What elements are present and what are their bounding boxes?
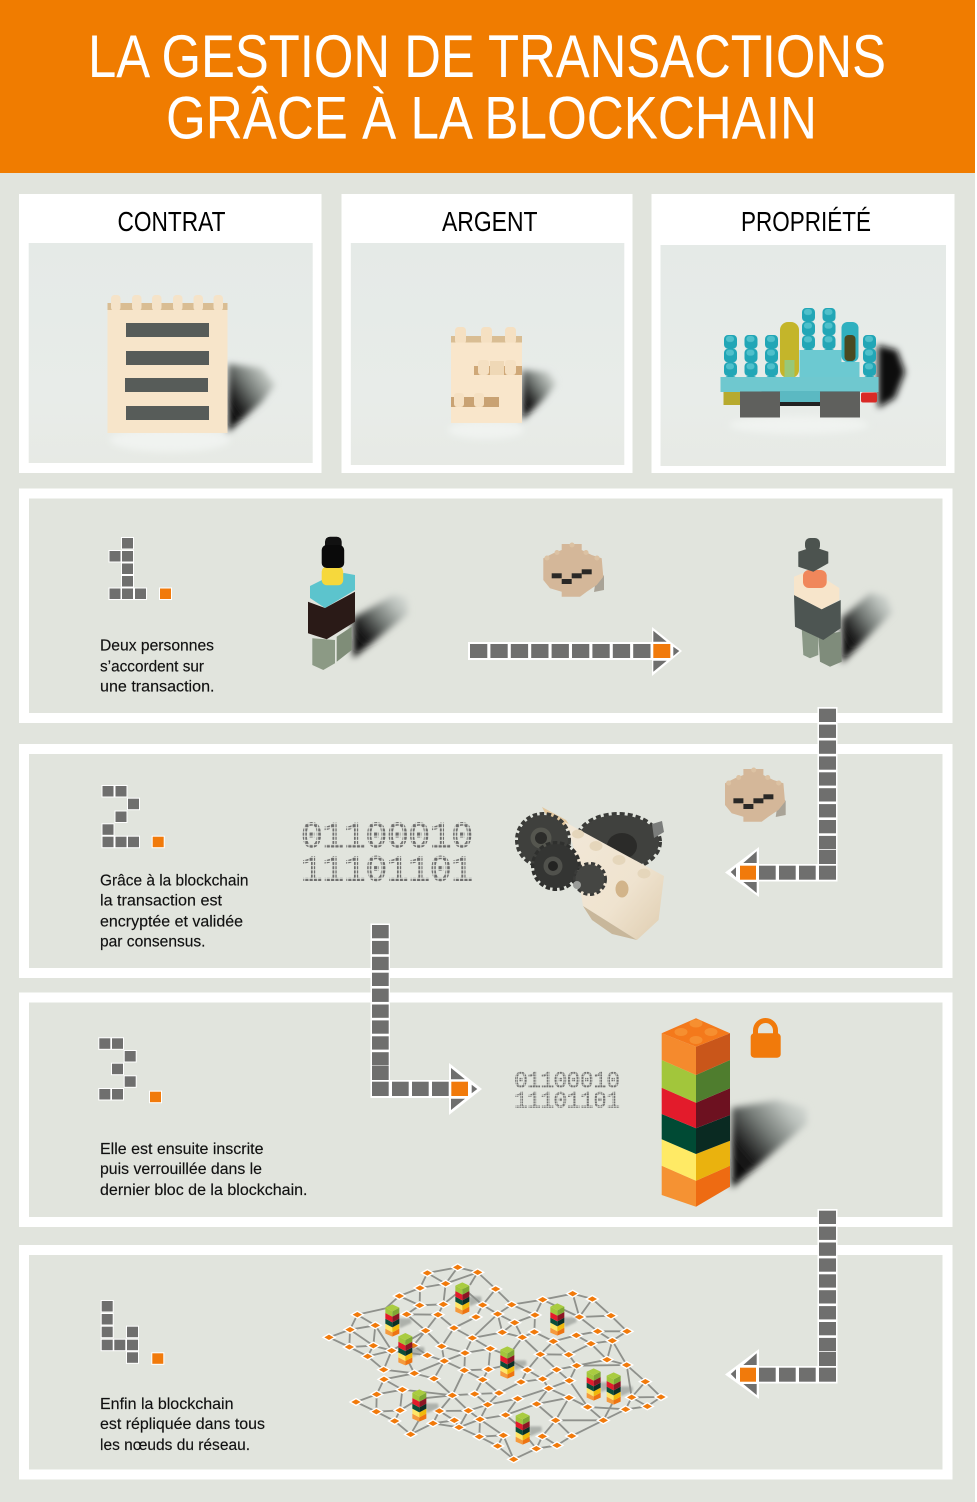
node tower [587,1368,613,1401]
node tower [455,1282,482,1315]
title banner [0,0,975,173]
panel: contrat: CONTRAT [118,206,226,237]
title banner: GRÂCE À LA BLOCKCHAIN [166,84,817,152]
icon: figure 1 [308,537,408,670]
icon: padlock [751,1020,781,1058]
binary code [514,1068,620,1114]
text: step 2: Grâce à la blockchain [100,873,248,890]
text: step 3: Elle est ensuite inscrite [100,1141,264,1158]
text: step 3: dernier bloc de la blockchain. [100,1182,308,1199]
icon: token [725,768,786,822]
arrow: transfer [468,627,682,676]
panel: argent: ARGENT [442,206,538,237]
panel: propriété [652,194,954,473]
text: step 4 [100,1396,265,1454]
text: step 1: s’accordent sur [100,658,205,676]
panel: step 1 [24,494,948,718]
binary code: 01100010 [301,817,473,858]
panel: argent [342,194,632,473]
node tower [500,1346,527,1379]
numeral 4 [102,1301,163,1364]
node tower [607,1372,633,1405]
network nodes [324,1265,666,1462]
text: step 3 [100,1141,308,1199]
binary code: 01100010 [514,1068,620,1094]
network links [329,1267,661,1459]
icon: car brick [720,308,880,418]
icon: contract brick [108,295,228,433]
numeral 1 [110,538,171,599]
panel: step 2 [24,749,948,973]
panel: propriété: PROPRIÉTÉ [741,206,871,237]
icon: gears brick [517,807,664,940]
text: step 4: est répliquée dans tous [100,1416,265,1433]
panel: step 3 [24,998,948,1222]
text: step 2: par consensus. [100,934,206,950]
numeral 2 [102,786,164,847]
node tower [398,1333,425,1365]
arrow: step 2 to step 3 [370,924,482,1115]
icon: figure 2 [794,538,892,667]
arrow: step 1 to step 2 [725,707,838,897]
icon: money brick [451,327,522,423]
arrow: step 3 to step 4 [725,1209,838,1399]
node tower [412,1389,439,1422]
text: step 3: puis verrouillée dans le [100,1161,262,1178]
text: step 4: les nœuds du réseau. [100,1437,250,1454]
node tower [385,1304,412,1337]
binary code: 11101101 [301,850,473,892]
binary code: 11101101 [514,1088,620,1114]
text: step 4: Enfin la blockchain [100,1396,234,1413]
text: step 1: une transaction. [100,678,214,696]
icon: block tower [662,1018,807,1207]
text: step 1: Deux personnes [100,638,214,654]
text: step 2: encryptée et validée [100,914,243,930]
text: step 2: la transaction est [100,893,223,910]
binary code [301,817,473,892]
text: step 1 [100,638,214,696]
icon: token [543,542,604,597]
network map [324,1265,666,1462]
node tower [516,1412,542,1445]
numeral 3 [99,1038,161,1102]
node tower [550,1303,577,1336]
panel: step 4 [24,1250,948,1474]
panel: contrat [19,194,322,473]
text: step 2 [100,873,248,950]
